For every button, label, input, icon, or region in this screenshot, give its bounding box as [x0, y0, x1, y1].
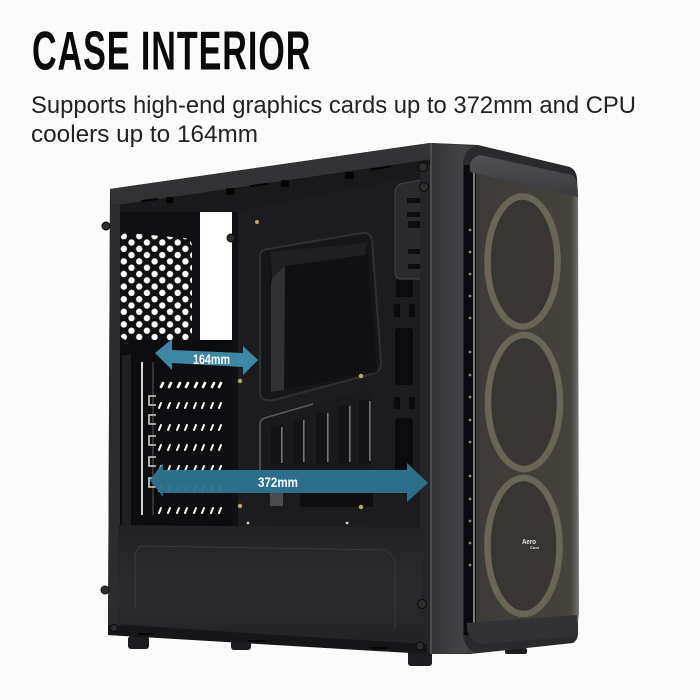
title: CASE INTERIOR — [32, 20, 310, 82]
subtitle text: coolers up to 164mm — [31, 121, 258, 148]
arrow: 372mm: 372mm — [258, 474, 298, 490]
LED strip studs — [469, 229, 471, 566]
arrow: 372mm — [150, 463, 428, 502]
arrow: 164mm: 164mm — [193, 352, 230, 367]
slot perforations — [159, 383, 221, 513]
perforated vent — [120, 233, 192, 340]
right cutouts — [394, 280, 415, 473]
case feet — [128, 636, 527, 666]
interior frame — [108, 143, 432, 653]
brand logo — [522, 539, 539, 550]
bottom fan ring — [488, 478, 560, 614]
top fan ring — [488, 196, 558, 326]
left rail — [108, 205, 120, 635]
connector plate — [395, 180, 421, 279]
middle fan ring — [488, 335, 560, 469]
lower tray emboss — [260, 388, 373, 507]
front bezel — [432, 143, 578, 654]
brand logo: Aero — [522, 539, 536, 546]
tray mounting holes — [247, 522, 348, 524]
bottom rail — [108, 625, 427, 654]
top panel — [110, 143, 433, 214]
smoked glass front panel — [476, 172, 579, 628]
expansion slot bay — [120, 340, 232, 528]
top trim — [470, 155, 578, 197]
front pillar — [430, 143, 476, 654]
motherboard tray — [232, 176, 422, 528]
white opening — [200, 212, 232, 372]
arrow: 164mm — [155, 339, 258, 375]
tray divider rail — [232, 212, 238, 528]
tray standoffs — [238, 220, 363, 509]
bottom trim — [467, 615, 578, 644]
side screws — [101, 162, 428, 650]
subtitle text: Supports high-end graphics cards up to 372mm and CPU — [31, 92, 636, 119]
computer case — [101, 143, 579, 666]
embossed tray panel — [260, 233, 381, 400]
brand logo: Cool — [530, 545, 539, 550]
power supply bay — [120, 212, 200, 522]
PSU shroud — [118, 525, 422, 645]
subtitle text — [31, 92, 636, 148]
right inner rail — [420, 165, 432, 653]
